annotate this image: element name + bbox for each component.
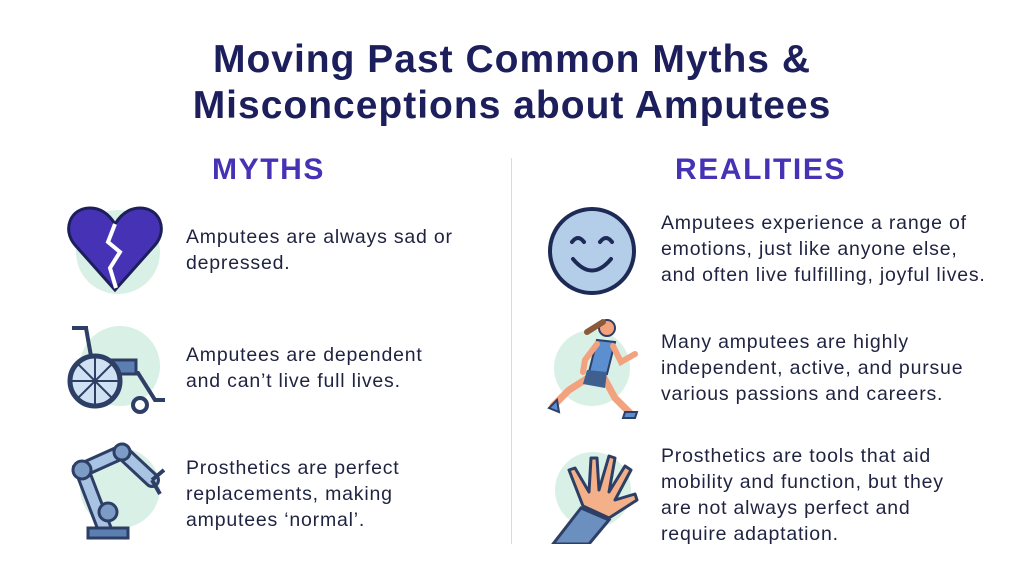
text: reality 3: Prosthetics are tools that aid [661,445,931,467]
text: reality 2 [661,331,963,405]
heading: myths: MYTHS [212,153,325,186]
icon: broken heart [67,206,163,294]
icon: smiley [548,207,636,295]
text: reality 1: Amputees experience a range of [661,212,967,234]
heading: realities: REALITIES [675,153,846,186]
icon: runner [547,319,638,419]
icon: hand [551,452,638,544]
text: reality 3: require adaptation. [661,523,839,545]
text: reality 2: Many amputees are highly [661,331,909,353]
text: myth 1: depressed. [186,252,290,274]
text: myth 3: Prosthetics are perfect [186,457,400,479]
text: myth 3: replacements, making [186,483,393,505]
text: reality 1 [661,212,986,286]
title: Moving Past Common Myths & [213,38,811,81]
text: myth 2 [186,344,423,392]
icon: wheelchair [68,326,165,414]
text: reality 3: mobility and function, but they [661,471,944,493]
text: myth 2: and can’t live full lives. [186,370,401,392]
text: reality 1: emotions, just like anyone else, [661,238,958,260]
text: reality 2: independent, active, and pursue [661,357,963,379]
text: myth 3: amputees ‘normal’. [186,509,365,531]
text: myth 2: Amputees are dependent [186,344,423,366]
text: reality 1: and often live fulfilling, joyful lives. [661,264,986,286]
text: myth 1 [186,226,453,274]
text: reality 2: various passions and careers. [661,383,943,405]
title [193,38,831,127]
icon: robotic arm [72,442,166,540]
title: Misconceptions about Amputees [193,84,831,127]
text: reality 3: are not always perfect and [661,497,911,519]
text: myth 3 [186,457,400,531]
text: myth 1: Amputees are always sad or [186,226,453,248]
text: reality 3 [661,445,944,545]
